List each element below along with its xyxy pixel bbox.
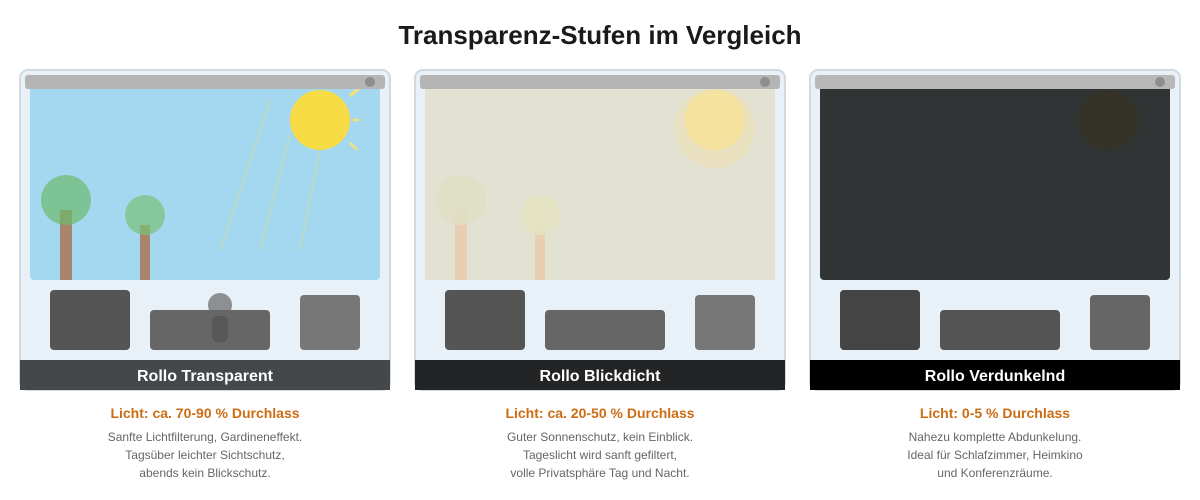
label bar: [415, 360, 785, 390]
card frame: [415, 70, 785, 390]
panel: Rollo Verdunkelnd: [810, 70, 1180, 480]
furniture: [445, 290, 755, 350]
light transmission: Licht: 0-5 % Durchlass: [920, 405, 1070, 421]
icon: sun: [1078, 90, 1138, 150]
roller blind bar: [420, 75, 780, 89]
roller blind bar: [815, 75, 1175, 89]
card frame: [810, 70, 1180, 390]
label bar: [20, 360, 390, 390]
tree 1: [436, 175, 486, 280]
sun rays: [349, 88, 362, 151]
panel: Rollo Blickdicht: [415, 70, 785, 480]
card frame: [20, 70, 390, 390]
tree 1: [41, 175, 91, 280]
title: Transparenz-Stufen im Vergleich: [398, 20, 802, 50]
label bar: Rollo Verdunkelnd: [925, 368, 1065, 385]
person silhouette: [208, 293, 232, 342]
label bar: Rollo Transparent: [137, 368, 274, 385]
label bar: [810, 360, 1180, 390]
description: [907, 430, 1083, 480]
window view: [425, 80, 775, 280]
description: volle Privatsphäre Tag und Nacht.: [510, 466, 690, 480]
description: Guter Sonnenschutz, kein Einblick.: [507, 430, 693, 444]
description: Nahezu komplette Abdunkelung.: [909, 430, 1081, 444]
window view: [30, 80, 380, 280]
description: abends kein Blickschutz.: [139, 466, 271, 480]
description: Ideal für Schlafzimmer, Heimkino: [907, 448, 1083, 462]
sun glow: [675, 88, 755, 168]
light transmission: Licht: ca. 20-50 % Durchlass: [505, 405, 695, 421]
description: und Konferenzräume.: [937, 466, 1053, 480]
panel: Rollo Transparent: [20, 70, 390, 480]
label bar: Rollo Blickdicht: [540, 368, 661, 385]
light beams: [220, 100, 320, 250]
tree 2: [520, 195, 560, 280]
icon: sun: [290, 90, 350, 150]
description: Tageslicht wird sanft gefiltert,: [523, 448, 677, 462]
light transmission: Licht: ca. 70-90 % Durchlass: [110, 405, 300, 421]
description: Tagsüber leichter Sichtschutz,: [125, 448, 285, 462]
description: [507, 430, 693, 480]
description: [108, 430, 302, 480]
tree 2: [125, 195, 165, 280]
furniture: [840, 290, 1150, 350]
window view: [820, 80, 1170, 280]
description: Sanfte Lichtfilterung, Gardineneffekt.: [108, 430, 302, 444]
furniture: [50, 290, 360, 350]
icon: sun: [685, 90, 745, 150]
roller blind bar: [25, 75, 385, 89]
